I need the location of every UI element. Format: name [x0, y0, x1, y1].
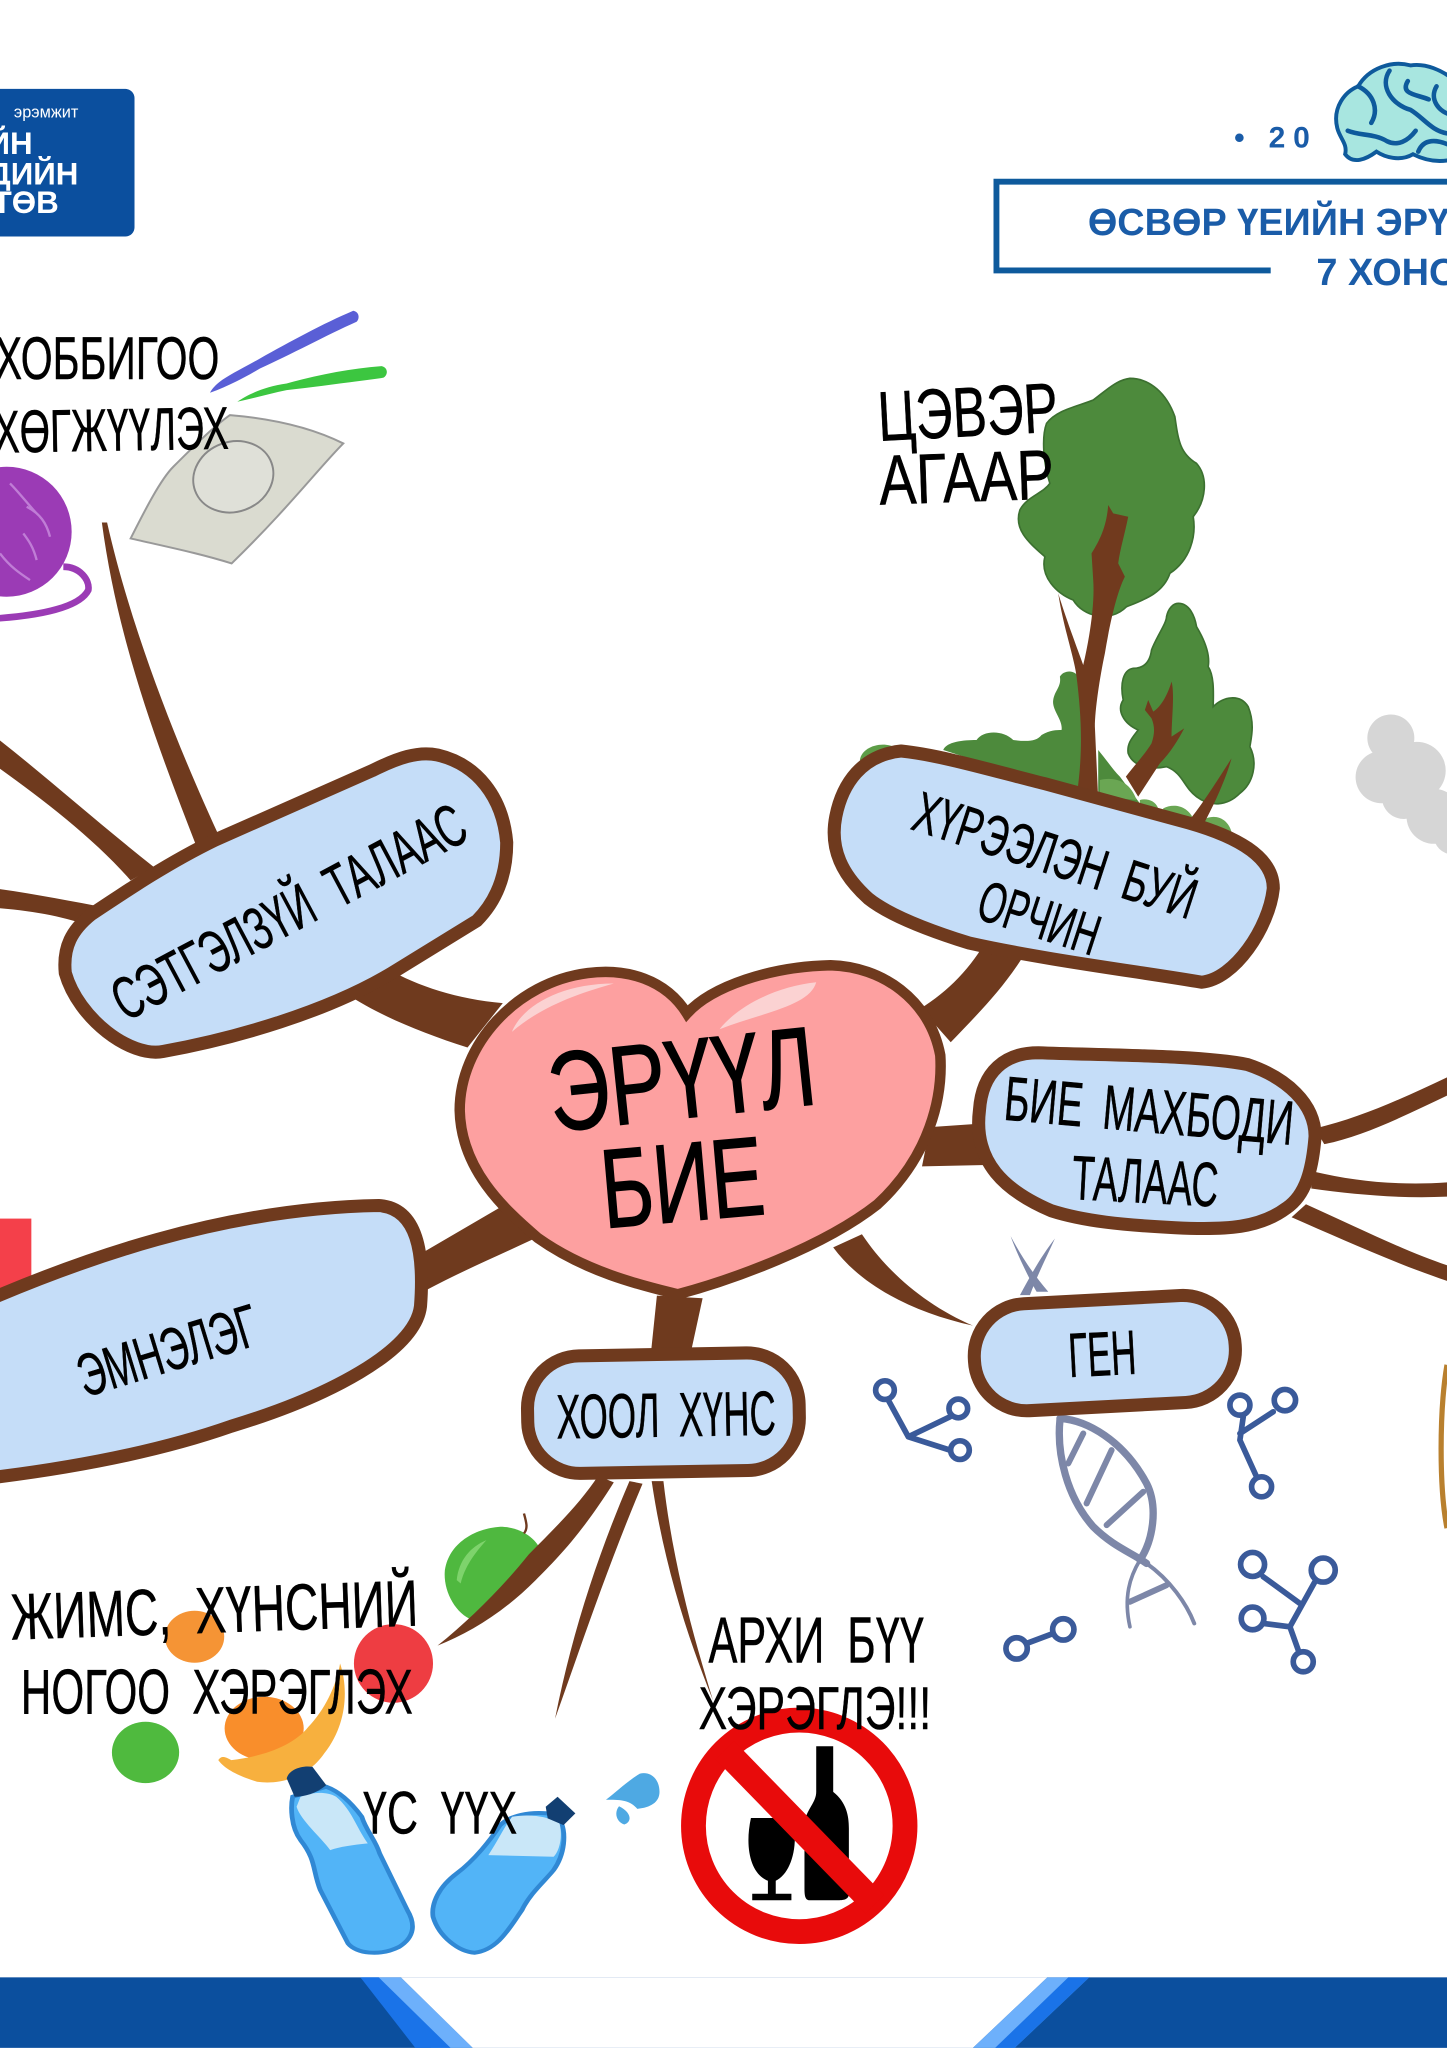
trunks	[1058, 505, 1128, 800]
node: mental	[65, 754, 507, 1052]
icon: DNA helix	[1011, 1236, 1194, 1627]
icon: molecule left	[876, 1381, 969, 1459]
icon: molecule right top	[1230, 1389, 1296, 1497]
node: food: ХООЛ ХҮНС	[556, 1379, 776, 1453]
icon: left water bottle	[287, 1766, 413, 1953]
label: clean air: АГААР	[878, 435, 1055, 520]
node: food	[527, 1352, 800, 1474]
icon: blue pencil	[210, 311, 359, 393]
branch: fruit twig	[437, 1476, 614, 1646]
branch: water twig	[555, 1481, 643, 1719]
hobby illustration	[0, 311, 387, 618]
icon: green apple	[445, 1513, 541, 1620]
right edge object	[1441, 1365, 1447, 1528]
central heart	[460, 965, 941, 1294]
branch: physical twig middle	[1311, 1172, 1447, 1197]
node: mental: СЭТГЭЛЗҮЙ ТАЛААС	[100, 790, 477, 1034]
icon: purple yarn ball	[0, 467, 88, 618]
small tree crown	[1121, 603, 1254, 804]
icon: no alcohol sign	[693, 1720, 905, 1932]
icon: molecule pair	[1006, 1619, 1074, 1659]
molecules	[876, 1381, 1335, 1672]
big tree crown	[1018, 378, 1204, 616]
icon: trees and bushes	[860, 378, 1254, 837]
node: hospital: ЭМНЭЛЭГ	[69, 1292, 266, 1410]
branch: heart to physical	[922, 1123, 986, 1166]
branches	[0, 523, 1447, 1719]
node: environment: ХҮРЭЭЛЭН БУЙ	[905, 779, 1205, 932]
node: environment: ОРЧИН	[970, 869, 1108, 968]
icon: big orange	[225, 1697, 304, 1760]
label: fruit and vegetables	[9, 1566, 419, 1728]
bushes	[860, 745, 897, 770]
icon: right water bottle	[433, 1797, 575, 1953]
title frame	[996, 182, 1447, 294]
label: hobby: ХӨГЖҮҮЛЭХ	[0, 395, 229, 466]
label: fruit and vegetables: НОГОО ХЭРЭГЛЭХ	[21, 1658, 413, 1728]
node: physical: ТАЛААС	[1070, 1143, 1220, 1221]
branch: heart to food	[650, 1296, 703, 1358]
label: clean air: ЦЭВЭР	[876, 368, 1060, 456]
label: hobby	[0, 325, 229, 466]
heart highlights	[512, 982, 816, 1032]
smoke cloud	[1356, 714, 1447, 854]
icon: red apple	[354, 1624, 433, 1703]
branch: heart to gene	[833, 1234, 973, 1326]
heart title: БИЕ	[595, 1112, 769, 1252]
logo badge: эрэмжит	[14, 104, 79, 122]
label: no alcohol	[699, 1604, 931, 1742]
icon: green ball	[112, 1722, 179, 1783]
fruits and bottles	[112, 1611, 575, 1953]
footer band	[0, 1977, 1447, 2048]
branch: heart to hospital	[421, 1208, 535, 1290]
label: drink water: ҮС ҮҮХ	[363, 1780, 517, 1847]
label: no alcohol: АРХИ БҮҮ	[708, 1604, 924, 1677]
node: gene	[972, 1293, 1238, 1413]
icon: molecule right bottom	[1241, 1552, 1335, 1672]
week number and brain icon: • 20	[1234, 122, 1318, 155]
logo badge	[0, 89, 135, 237]
branch: hobby twig	[102, 523, 222, 852]
branch: physical twig upper	[1315, 1075, 1447, 1144]
label: fruit and vegetables: ЖИМС, ХҮНСНИЙ	[9, 1566, 419, 1654]
icon: banana	[218, 1663, 345, 1782]
heart title	[542, 1002, 822, 1252]
branch: heart to mental	[341, 969, 503, 1048]
label: clean air	[876, 368, 1060, 520]
node: environment	[834, 751, 1273, 982]
label: hobby: ХОББИГОО	[0, 325, 219, 392]
icon: water drops	[606, 1773, 660, 1825]
label: no alcohol: ХЭРЭГЛЭ!!!	[699, 1675, 931, 1742]
branch: alcohol twig	[652, 1481, 713, 1700]
branch: physical twig lower	[1292, 1204, 1447, 1283]
node: physical	[979, 1053, 1315, 1229]
branch: left twig upper	[0, 735, 154, 880]
icon: paper sheet	[131, 415, 343, 563]
week number and brain icon	[1234, 64, 1447, 161]
branch: heart to environment	[921, 938, 1026, 1042]
node: hospital	[0, 1206, 422, 1480]
node: gene: ГЕН	[1067, 1318, 1138, 1391]
branch: left twig lower	[0, 888, 107, 927]
heart title: ЭРҮҮЛ	[542, 1002, 822, 1156]
icon: small orange	[165, 1611, 224, 1663]
icon: green pencil	[237, 366, 387, 402]
red cross fragment	[0, 1219, 31, 1290]
